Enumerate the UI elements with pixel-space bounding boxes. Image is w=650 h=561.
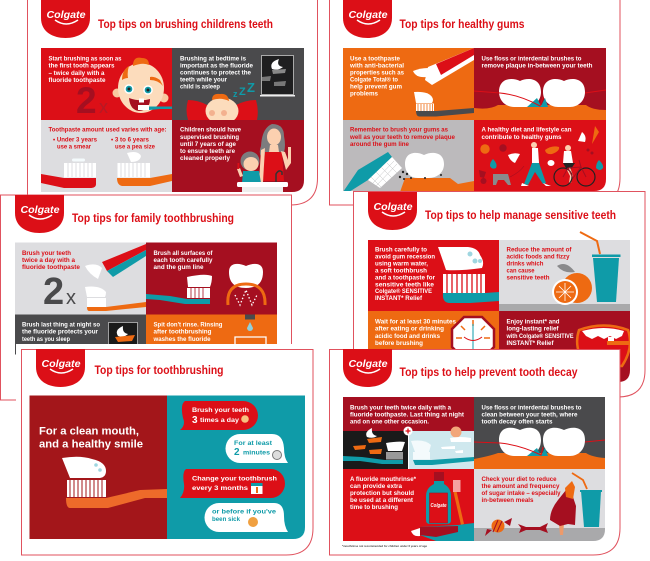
tip: wait 30 minutes: acidic food and drinks xyxy=(375,333,440,340)
logo: Colgate xyxy=(374,201,413,213)
tip: instant relief xyxy=(499,311,630,382)
card: prevent tooth decay xyxy=(330,349,620,555)
tip: supervised brushing xyxy=(172,120,304,192)
tip: toothpaste amount: use a pea size xyxy=(115,144,155,150)
tip: supervised brushing: supervised brushing xyxy=(180,134,239,141)
tip: toothpaste amount: • 3 to 6 years xyxy=(111,136,149,144)
logo xyxy=(343,0,392,38)
tip: bedtime: child is asleep xyxy=(180,84,220,90)
tip: instant relief: long-lasting relief xyxy=(506,326,559,332)
card: family toothbrushing xyxy=(0,195,292,400)
tip: bedtime xyxy=(172,48,304,124)
tip: bedtime: continues to protect the xyxy=(180,70,251,76)
card: brushing childrens teeth xyxy=(28,0,318,205)
card: healthy gums xyxy=(330,0,620,205)
tip: spit dont rinse: Spit don't rinse. Rinsing xyxy=(154,322,222,328)
tip: brush all surfaces: each tooth carefully xyxy=(154,257,213,264)
tip: acidic foods xyxy=(499,240,630,311)
tip: brush last thing at night: Brush last thing at night so xyxy=(22,322,100,328)
tip: mouthrinse: A fluoride mouthrinse* xyxy=(350,476,416,483)
title: Top tips on brushing childrens teeth xyxy=(98,19,273,31)
tip: bedtime: important as the fluoride xyxy=(180,62,253,70)
right panel: speech bubbles xyxy=(167,396,305,540)
tip: start brushing: the first tooth appears xyxy=(48,62,115,70)
left panel: clean mouth: and a healthy smile xyxy=(39,438,143,450)
tip: floss xyxy=(474,397,605,469)
tip: start brushing: Start brushing as soon as xyxy=(48,56,122,62)
logo: Colgate xyxy=(20,204,60,216)
tips panel xyxy=(368,240,630,382)
tip: bedtime: Z xyxy=(247,80,255,95)
tip: supervised brushing: to ensure teeth are xyxy=(180,148,235,155)
bubble: 3 times a day: times a day xyxy=(200,417,239,424)
tip: brush twice a day: fluoride toothpaste xyxy=(22,264,80,271)
tip: floss xyxy=(474,48,606,120)
tip: brush gums: around the gum line xyxy=(350,141,409,148)
tip: mouthrinse: protection but should xyxy=(350,490,414,497)
straw above cup xyxy=(580,232,600,254)
tips panel xyxy=(343,397,605,541)
title: Top tips for healthy gums xyxy=(400,19,524,31)
tip: mouthrinse: can provide extra xyxy=(350,483,402,490)
tip: brush carefully: avoid gum recession xyxy=(375,254,435,260)
tip: bedtime: teeth while your xyxy=(180,76,227,84)
tips panel xyxy=(15,242,277,354)
logo: Colgate xyxy=(348,9,388,21)
tip: brush carefully: sensitive teeth like xyxy=(375,282,434,288)
tip: brush carefully: and a toothpaste for xyxy=(375,274,435,282)
tip: floss: remove plaque in-between your teeth xyxy=(482,62,592,70)
tip: wait 30 minutes: before brushing xyxy=(375,340,423,347)
tip: brush twice a day: 2 xyxy=(43,271,64,313)
tip: anti-bacterial toothpaste: problems xyxy=(350,90,378,98)
tip: supervised brushing: until 7 years of age xyxy=(180,141,236,148)
tip: diet: the amount and frequency xyxy=(482,483,560,490)
tip: start brushing: – twice daily with a xyxy=(48,70,105,77)
tip: brush twice a day: twice a day with a xyxy=(22,257,75,264)
tip: anti-bacterial toothpaste: Use a toothpaste xyxy=(350,56,400,62)
title: Top tips for toothbrushing xyxy=(94,365,224,377)
left panel: clean mouth: For a clean mouth, xyxy=(39,426,139,438)
tip: bedtime: Z xyxy=(239,86,246,98)
tip: brush twice daily: fluoride toothpaste. Last thing at night xyxy=(350,412,465,418)
bubble: 3 times a day: Brush your teeth xyxy=(192,407,249,414)
title: Top tips to help manage sensitive teeth xyxy=(425,210,616,222)
footnote: *mouthrinse not recommended for children under 6 years of age xyxy=(342,544,427,548)
tip: brush carefully xyxy=(368,240,499,311)
logo xyxy=(15,195,64,233)
bubble: 2 minutes: minutes xyxy=(243,450,270,456)
tip: supervised brushing: cleaned properly xyxy=(180,155,230,162)
tip: brush gums xyxy=(343,120,474,192)
tips panel xyxy=(30,396,305,540)
title: Top tips to help prevent tooth decay xyxy=(400,367,578,379)
tip: brush twice a day xyxy=(15,242,146,314)
tip: instant relief: with Colgate® SENSITIVE xyxy=(506,332,574,340)
tip: mouthrinse xyxy=(343,469,474,541)
tip: start brushing: x xyxy=(99,97,108,117)
tip: anti-bacterial toothpaste: properties such as xyxy=(350,70,404,76)
tip: acidic foods: can cause xyxy=(506,268,535,274)
tip: start brushing: fluoride toothpaste xyxy=(48,77,106,84)
tip: start brushing: 2 xyxy=(76,80,97,121)
tip: brush carefully: INSTANT* Relief xyxy=(375,295,423,302)
tip: diet and lifestyle: contribute to healthy gums xyxy=(482,134,562,141)
tip: diet: in-between meals xyxy=(482,497,534,504)
logo xyxy=(368,192,417,230)
tip: brush twice daily: and on one other occasion. xyxy=(350,418,429,426)
tip: anti-bacterial toothpaste xyxy=(343,48,474,120)
tip: wait 30 minutes: Wait for at least 30 minutes xyxy=(375,318,456,326)
tip: brush carefully: Colgate® SENSITIVE xyxy=(375,287,433,295)
tip: wait 30 minutes: after eating or drinking xyxy=(375,326,444,332)
tip: mouthrinse: Colgate xyxy=(430,503,446,509)
tip: wait 30 minutes xyxy=(368,311,499,349)
tip: floss: tooth decay often starts xyxy=(482,418,553,426)
title: Top tips for family toothbrushing xyxy=(72,213,234,225)
bubble: 2 minutes xyxy=(225,434,288,463)
tip: diet and lifestyle xyxy=(474,120,606,192)
bubble: every 3 months: Change your toothbrush xyxy=(192,476,277,482)
tip: brush twice a day: x xyxy=(66,287,76,309)
bubble: 3 times a day: 3 xyxy=(192,415,198,426)
tip: brush gums: well as your teeth to remove plaque xyxy=(349,134,455,141)
bubble: every 3 months xyxy=(180,469,285,498)
card: toothbrushing xyxy=(16,344,321,561)
tip: spit dont rinse: washes the fluoride xyxy=(153,336,211,343)
tip: acidic foods: acidic foods and fizzy xyxy=(506,254,570,260)
tip: floss: clean between your teeth, where xyxy=(482,412,578,418)
tips panel xyxy=(41,48,304,192)
tip: brush carefully: using warm water, xyxy=(375,260,428,268)
tip: brush carefully: Brush carefully to xyxy=(375,246,427,254)
tip: brush last thing at night: the fluoride protects your xyxy=(22,328,98,336)
tip: brush last thing at night: teeth as you sleep xyxy=(22,336,70,343)
bubble: been sick xyxy=(204,503,288,532)
tip: acidic foods: Reduce the amount of xyxy=(506,246,572,254)
bubble: 3 times a day xyxy=(180,401,258,430)
bubble: 2 minutes: 2 xyxy=(234,447,240,458)
logo xyxy=(41,0,90,38)
tip: diet xyxy=(474,469,605,541)
bubble: every 3 months: every 3 months xyxy=(192,485,248,492)
tip: instant relief: INSTANT* Relief xyxy=(506,340,554,347)
tip: brush twice daily: Brush your teeth twice daily with a xyxy=(350,404,451,412)
tip: acidic foods: drinks which xyxy=(506,260,544,268)
tip: anti-bacterial toothpaste: with anti-bacterial xyxy=(349,62,404,70)
tip: spit dont rinse: after toothbrushing xyxy=(154,328,212,336)
tip: diet: Check your diet to reduce xyxy=(482,476,557,483)
tip: bedtime: z xyxy=(233,89,238,99)
tip: toothpaste amount: Toothpaste amount used varies with age: xyxy=(48,126,166,134)
tip: diet: of sugar intake – especially xyxy=(482,490,561,497)
tip: supervised brushing: Children should have xyxy=(180,126,241,134)
bubble: been sick: been sick xyxy=(212,516,240,523)
tip: brush carefully: a soft toothbrush xyxy=(375,268,427,274)
logo xyxy=(343,349,392,387)
tip: brush all surfaces: Brush all surfaces of xyxy=(154,250,213,257)
tip: floss: Use floss or interdental brushes to xyxy=(482,56,582,62)
tip: toothpaste amount: use a smear xyxy=(57,144,91,150)
tip: brush all surfaces: and the gum line xyxy=(154,264,204,271)
tip: brush twice daily xyxy=(343,397,474,469)
tips panel xyxy=(343,48,606,192)
logo: Colgate xyxy=(42,358,81,370)
left panel: clean mouth xyxy=(30,396,167,540)
tip: brush last thing at night xyxy=(15,314,146,354)
logo xyxy=(36,349,85,387)
logo: Colgate xyxy=(46,9,86,21)
tip: start brushing xyxy=(41,48,172,121)
tip: brush gums: Remember to brush your gums as xyxy=(350,126,448,134)
tip: mouthrinse: be used at a different xyxy=(350,497,414,504)
tip: anti-bacterial toothpaste: Colgate Total® to xyxy=(350,76,398,84)
tip: toothpaste amount: • Under 3 years xyxy=(53,136,97,144)
tip: brush twice a day: Brush your teeth xyxy=(22,250,71,257)
tip: acidic foods: sensitive teeth xyxy=(506,274,550,282)
bubble: 2 minutes: For at least xyxy=(234,440,273,447)
logo: Colgate xyxy=(348,358,388,370)
tip: diet and lifestyle: A healthy diet and lifestyle can xyxy=(482,126,572,134)
tip: mouthrinse: time to brushing xyxy=(350,504,398,511)
tip: floss: Use floss or interdental brushes to xyxy=(482,404,582,412)
tip: instant relief: Enjoy instant* and xyxy=(506,318,560,326)
tip: brush all surfaces xyxy=(146,242,277,314)
tip: bedtime: Brushing at bedtime is xyxy=(180,56,246,62)
tip: spit dont rinse xyxy=(146,314,277,344)
bubble: been sick: or before if you've xyxy=(212,509,276,516)
tip: anti-bacterial toothpaste: help prevent gum xyxy=(350,84,402,90)
card: sensitive teeth xyxy=(354,192,645,397)
tip: toothpaste amount xyxy=(41,120,172,192)
